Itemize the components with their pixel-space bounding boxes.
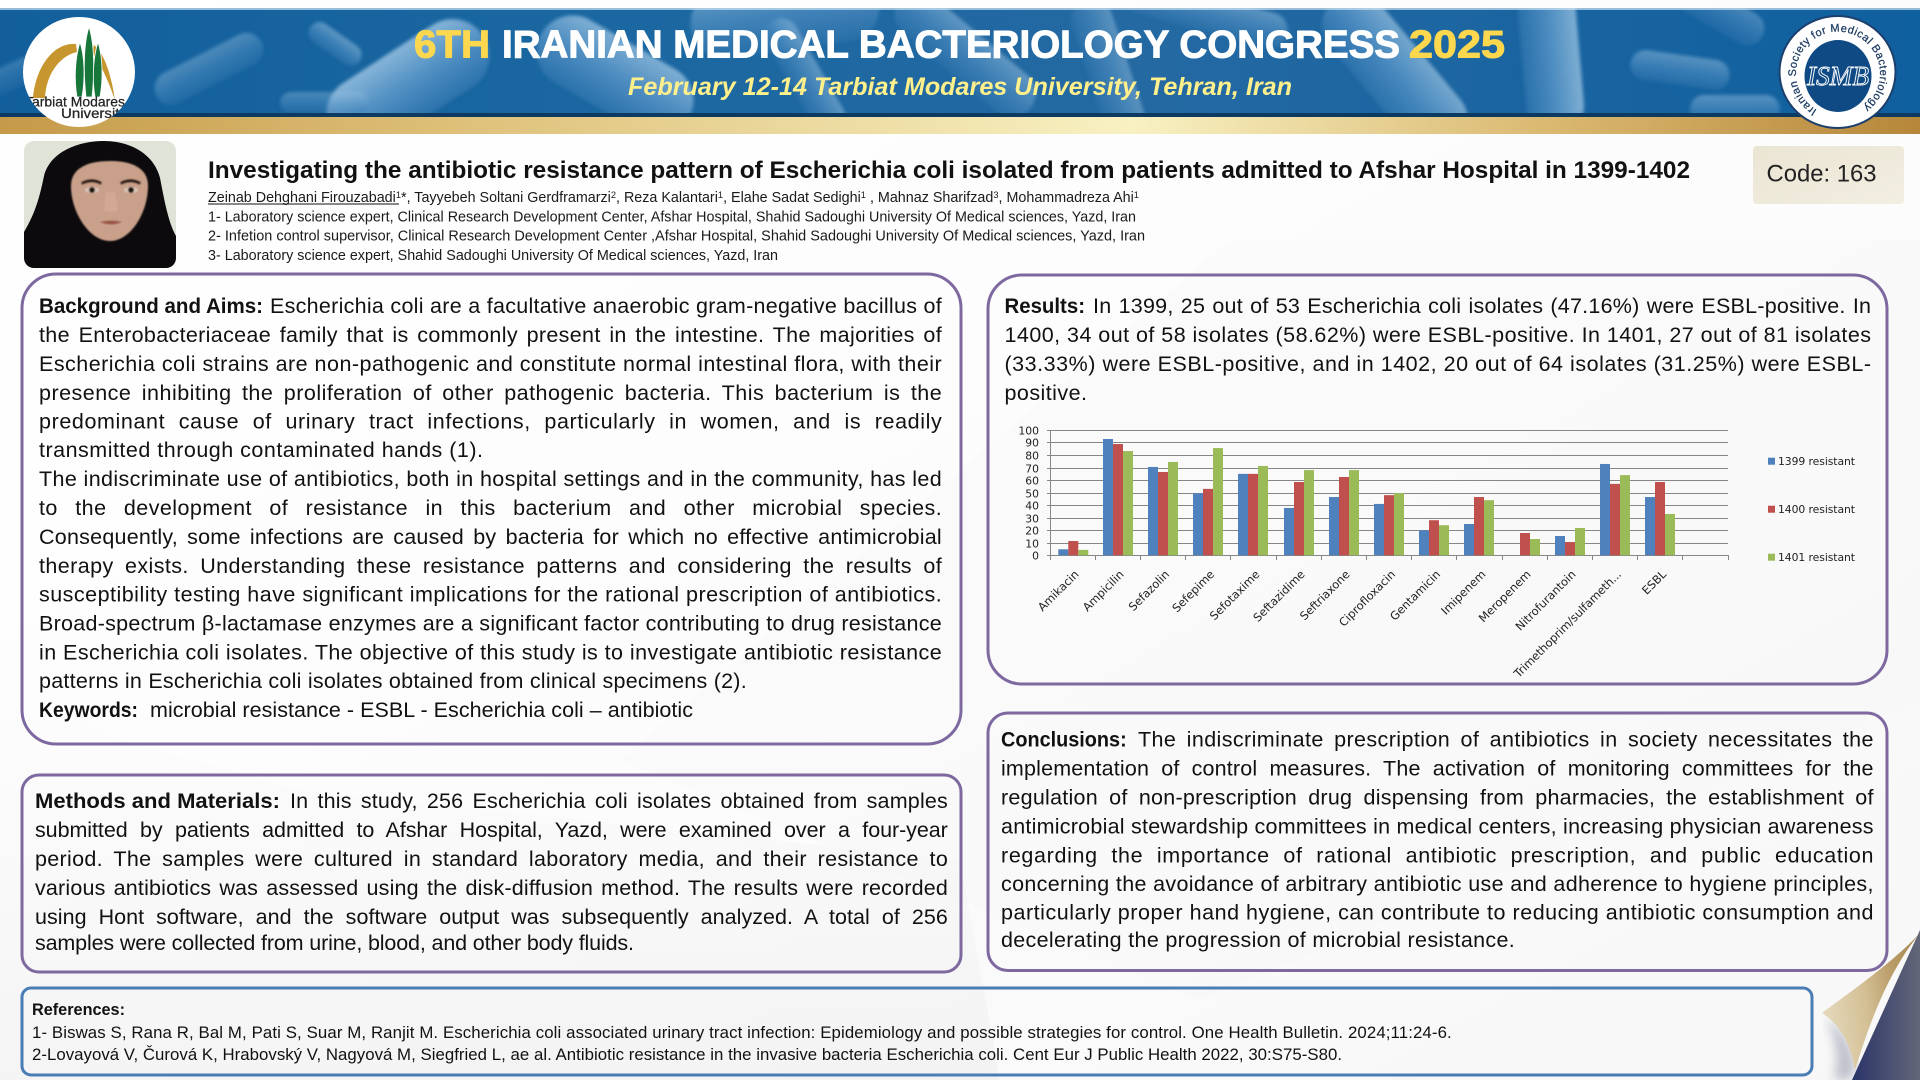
y axis labels: 20 — [1025, 524, 1039, 538]
panel: references: References: — [32, 1000, 125, 1019]
panel: methods and materials: submitted by patients admitted to Afshar Hospital, Yazd, were examined over a four-year — [35, 818, 948, 842]
legend: 1401 resistant — [1778, 551, 1855, 564]
panel: background and aims: therapy exists. Understanding these resistance patterns and considering the results of — [39, 554, 942, 578]
authors and affiliations: , Elahe Sadat Sedighi — [723, 190, 861, 206]
authors and affiliations: 1 — [1134, 190, 1139, 201]
gold ribbon — [0, 117, 1920, 134]
category labels: Sefepime — [1169, 567, 1217, 615]
panel: background and aims: Escherichia coli strains are non-pathogenic and constitute normal intestinal flora, with their — [39, 352, 942, 376]
legend: 1400 resistant — [1778, 503, 1855, 516]
authors and affiliations: 2 — [611, 190, 616, 201]
bars: 1399 resistant — [1058, 439, 1655, 555]
y axis labels: 80 — [1025, 450, 1039, 462]
category labels: Seftriaxone — [1297, 567, 1353, 623]
panel: background and aims: susceptibility testing have significant implications for the rational prescription of antibiotics. — [39, 582, 942, 606]
authors and affiliations: 3 — [993, 190, 999, 201]
logo: Tarbiat Modares University: Tarbiat Modares — [25, 94, 125, 110]
panel: background and aims: Broad-spectrum β-lactamase enzymes are a significant factor contributing to drug resistance — [39, 612, 942, 636]
authors and affiliations — [208, 190, 1145, 264]
panel: results: (33.33%) were ESBL-positive, and in 1402, 20 out of 64 isolates (31.25%) were ESBL- — [1004, 352, 1871, 376]
panel: conclusions: regulation of non-prescription drug dispensing from pharmacies, the establishment of — [1001, 786, 1874, 810]
authors and affiliations: , Reza Kalantari — [616, 190, 718, 206]
authors and affiliations: 2- Infetion control supervisor, Clinical Research Development Center ,Afshar Hospital, Shahid Sadoughi University Of Medical sciences, Yazd, Iran — [208, 228, 1145, 244]
panel: background and aims: presence inhibiting the proliferation of other pathogenic bacteria. This bacterium is the — [39, 381, 942, 405]
y axis labels: 60 — [1025, 474, 1039, 488]
code badge — [1753, 146, 1904, 204]
panel: background and aims: predominant cause of urinary tract infections, particularly in women, and is readily — [39, 410, 942, 434]
panel: background and aims: Keywords: — [39, 698, 138, 722]
panel: background and aims: patterns in Escherichia coli isolates obtained from clinical specimens (2). — [39, 669, 747, 693]
y axis labels: 40 — [1025, 500, 1039, 512]
panel: results: Results: — [1004, 294, 1085, 318]
category labels: Sefotaxime — [1207, 567, 1262, 623]
category labels: Ampicilin — [1080, 567, 1127, 614]
congress date and venue: February 12-14 Tarbiat Modares University, Tehran, Iran — [628, 73, 1292, 101]
authors and affiliations: , Mohammadreza Ahi — [999, 190, 1134, 206]
author photo — [24, 141, 176, 268]
panel: background and aims: The indiscriminate use of antibiotics, both in hospital settings and in the community, has led — [39, 467, 942, 491]
authors and affiliations: , Mahnaz Sharifzad — [866, 190, 993, 206]
panel: results: positive. — [1004, 381, 1087, 405]
panel: references: 2-Lovayová V, Čurová K, Hrabovský V, Nagyová M, Siegfried L, ae al. Antibiotic resistance in the invasive bacteria Escherichia coli. Cent Eur J Public Health 2022, 30:S75-S80. — [32, 1045, 1342, 1064]
panel: background and aims: microbial resistance - ESBL - Escherichia coli – antibiotic — [150, 698, 693, 722]
authors and affiliations: 1 — [718, 190, 723, 201]
poster title: Investigating the antibiotic resistance pattern of Escherichia coli isolated from patients admitted to Afshar Hospital in 1399-1402 — [208, 157, 1690, 184]
logo: Tarbiat Modares University: University — [61, 105, 127, 121]
panel: methods and materials: samples were collected from urine, blood, and other body fluids. — [35, 931, 634, 955]
panel: conclusions: regarding the importance of rational antibiotic prescription, and public education — [1001, 844, 1874, 868]
y axis labels: 10 — [1025, 538, 1039, 550]
panel: conclusions: concerning the avoidance of arbitrary antibiotic use and adherence to hygiene principles, — [1001, 872, 1874, 896]
bar chart: antibiotic resistance by year — [1018, 424, 1855, 681]
authors and affiliations: 1- Laboratory science expert, Clinical Research Development Center, Afshar Hospital, Shahid Sadoughi University Of Medical sciences, Yazd, Iran — [208, 210, 1136, 226]
panel: background and aims: Background and Aims: — [39, 294, 263, 318]
logo: Tarbiat Modares University — [23, 17, 135, 127]
panel: references — [22, 988, 1812, 1075]
panel: methods and materials: Methods and Materials: — [35, 789, 280, 813]
y axis labels: 0 — [1032, 550, 1039, 562]
category labels: Imipenem — [1438, 567, 1488, 618]
page curl corner — [1822, 930, 1920, 1080]
panel: background and aims — [22, 274, 961, 744]
category labels: Trimethoprim/sulfameth... — [1510, 567, 1624, 681]
panel: conclusions — [988, 713, 1887, 970]
panel: references: 1- Biswas S, Rana R, Bal M, Pati S, Suar M, Ranjit M. Escherichia coli associated urinary tract infection: Epidemiology and possible strategies for control. One Health Bulletin. 2024;11:24-6. — [32, 1023, 1452, 1042]
category labels: Meropenem — [1476, 567, 1534, 625]
authors and affiliations: Zeinab Dehghani Firouzabadi — [208, 190, 399, 206]
panel: methods and materials — [22, 775, 961, 972]
bars: 1400 resistant — [1068, 444, 1665, 555]
code badge: Code: 163 — [1766, 160, 1876, 188]
y axis labels — [1018, 424, 1039, 562]
panel: conclusions: antimicrobial stewardship committees in medical centers, increasing physician awareness — [1001, 814, 1874, 838]
panel: methods and materials: period. The samples were cultured in standard laboratory media, and their resistance to — [35, 847, 948, 871]
category labels: ESBL — [1639, 567, 1670, 597]
y axis labels: 100 — [1018, 424, 1039, 438]
panel: conclusions: implementation of control measures. The activation of monitoring committees for the — [1001, 756, 1874, 780]
congress title: IRANIAN MEDICAL BACTERIOLOGY CONGRESS — [502, 24, 1400, 66]
category labels: Sefazolin — [1126, 567, 1172, 614]
panel: background and aims: Escherichia coli are a facultative anaerobic gram-negative bacillus of — [270, 294, 942, 318]
category labels: Nitrofurantoin — [1513, 567, 1579, 633]
y axis labels: 90 — [1025, 436, 1039, 450]
authors and affiliations: 1 — [396, 190, 401, 201]
authors and affiliations: 1 — [861, 190, 866, 201]
y axis labels: 50 — [1025, 488, 1039, 500]
bacteria background — [0, 8, 1781, 113]
authors and affiliations: 3- Laboratory science expert, Shahid Sadoughi University Of Medical sciences, Yazd, Iran — [208, 248, 778, 264]
category labels: Amikacin — [1035, 567, 1082, 614]
panel: conclusions: Conclusions: — [1001, 728, 1127, 752]
panel: methods and materials: In this study, 256 Escherichia coli isolates obtained from samples — [290, 789, 948, 813]
bars: 1401 resistant — [1078, 448, 1675, 555]
panel: background and aims: transmitted through contaminated hands (1). — [39, 438, 483, 462]
category labels: Gentamicin — [1387, 567, 1443, 623]
logo: Iranian Society for Medical Bacteriology: ISMB — [1806, 61, 1869, 91]
y axis and grid — [1047, 430, 1728, 560]
congress title: 2025 — [1409, 24, 1505, 66]
y axis labels: 30 — [1025, 512, 1039, 526]
panel: conclusions: particularly proper hand hygiene, can contribute to reducing antibiotic consumption and — [1001, 900, 1874, 924]
panel: background and aims: to the development of resistance in this bacterium and other microbial species. — [39, 496, 942, 520]
panel: conclusions: decelerating the progression of microbial resistance. — [1001, 928, 1515, 952]
congress title: 6TH — [414, 24, 490, 66]
legend: 1399 resistant — [1778, 455, 1855, 468]
panel: methods and materials: using Hont software, and the software output was subsequently analyzed. A total of 256 — [35, 905, 948, 929]
authors and affiliations: *, Tayyebeh Soltani Gerdframarzi — [401, 190, 611, 206]
panel: conclusions: The indiscriminate prescription of antibiotics in society necessitates the — [1138, 728, 1874, 752]
panel: background and aims: in Escherichia coli isolates. The objective of this study is to investigate antibiotic resistance — [39, 640, 942, 664]
panel: background and aims: the Enterobacteriaceae family that is commonly present in the intestine. The majorities of — [39, 323, 942, 347]
category labels — [1035, 567, 1670, 681]
category labels: Seftazidime — [1250, 567, 1308, 625]
y axis labels: 70 — [1025, 462, 1039, 476]
logo: Iranian Society for Medical Bacteriology: Iranian Society for Medical Bacteriology — [1788, 24, 1888, 116]
panel: results — [988, 275, 1887, 684]
panel: methods and materials: various antibiotics was assessed using the disk-diffusion method. The results were recorded — [35, 876, 948, 900]
category labels: Ciprofloxacin — [1336, 567, 1398, 629]
header banner — [0, 8, 1920, 117]
panel: results: 1400, 34 out of 58 isolates (58.62%) were ESBL-positive. In 1401, 27 out of 81 isolates — [1004, 323, 1871, 347]
panel: background and aims: Consequently, some infections are caused by bacteria for which no effective antimicrobial — [39, 525, 942, 549]
legend — [1768, 455, 1855, 564]
panel: results: In 1399, 25 out of 53 Escherichia coli isolates (47.16%) were ESBL-positive. In — [1093, 294, 1871, 318]
